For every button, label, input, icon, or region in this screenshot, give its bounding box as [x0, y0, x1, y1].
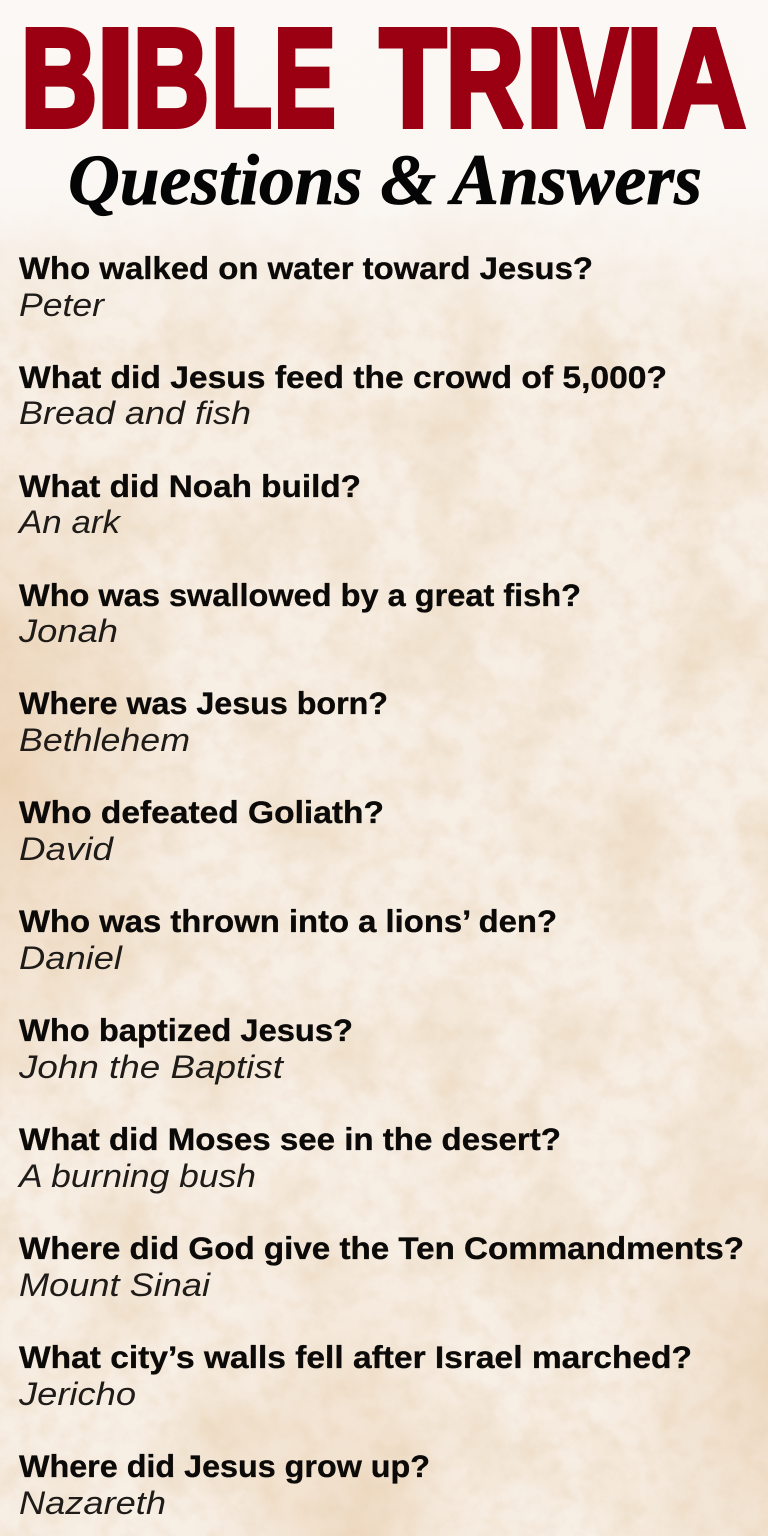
title: I [625, 0, 664, 156]
trivia item 7 [19, 903, 557, 976]
trivia item 8: Who baptized Jesus? [19, 1012, 353, 1048]
trivia item 2: Bread and fish [19, 395, 251, 431]
subtitle: Questions & Answers [68, 140, 702, 220]
trivia item 9: A burning bush [17, 1158, 256, 1194]
trivia item 1: Who walked on water toward Jesus? [19, 250, 593, 286]
title: R [446, 0, 524, 156]
trivia item 8: John the Baptist [18, 1049, 284, 1085]
title: I [96, 0, 135, 156]
trivia item 10: Mount Sinai [19, 1267, 211, 1303]
trivia item 11: What city’s walls fell after Israel marched? [19, 1339, 692, 1375]
trivia item 5: Where was Jesus born? [19, 685, 388, 721]
trivia item 3 [17, 468, 361, 540]
trivia item 1 [19, 250, 593, 323]
title: E [274, 0, 336, 156]
trivia item 6 [19, 794, 384, 867]
title: A [663, 0, 746, 156]
trivia item 10: Where did God give the Ten Commandments? [19, 1230, 744, 1266]
title: V [562, 0, 627, 156]
trivia item 3: What did Noah build? [19, 468, 361, 504]
title: T [380, 0, 446, 156]
trivia item 7: Daniel [19, 940, 123, 976]
trivia item 7: Who was thrown into a lions’ den? [19, 903, 557, 939]
trivia item 9 [17, 1121, 561, 1194]
trivia item 6: Who defeated Goliath? [19, 794, 384, 830]
trivia item 2: What did Jesus feed the crowd of 5,000? [19, 359, 667, 395]
trivia item 4: Who was swallowed by a great fish? [19, 577, 581, 613]
title: I [525, 0, 564, 156]
trivia item 12 [19, 1448, 430, 1521]
trivia item 4 [18, 577, 581, 649]
trivia item 8 [18, 1012, 353, 1085]
title [21, 0, 746, 156]
trivia item 2 [19, 359, 667, 431]
trivia item 10 [19, 1230, 744, 1303]
trivia item 4: Jonah [18, 613, 118, 649]
title: B [133, 0, 209, 156]
trivia item 11: Jericho [18, 1376, 136, 1412]
trivia item 5: Bethlehem [19, 722, 190, 758]
title: B [21, 0, 97, 156]
trivia item 12: Nazareth [19, 1485, 166, 1521]
trivia item 1: Peter [19, 287, 105, 323]
trivia item 12: Where did Jesus grow up? [19, 1448, 430, 1484]
trivia item 9: What did Moses see in the desert? [19, 1121, 561, 1157]
trivia item 11 [18, 1339, 692, 1412]
trivia item 5 [19, 685, 388, 758]
trivia item 3: An ark [17, 504, 122, 540]
title: L [211, 0, 272, 156]
trivia item 6: David [19, 831, 114, 867]
